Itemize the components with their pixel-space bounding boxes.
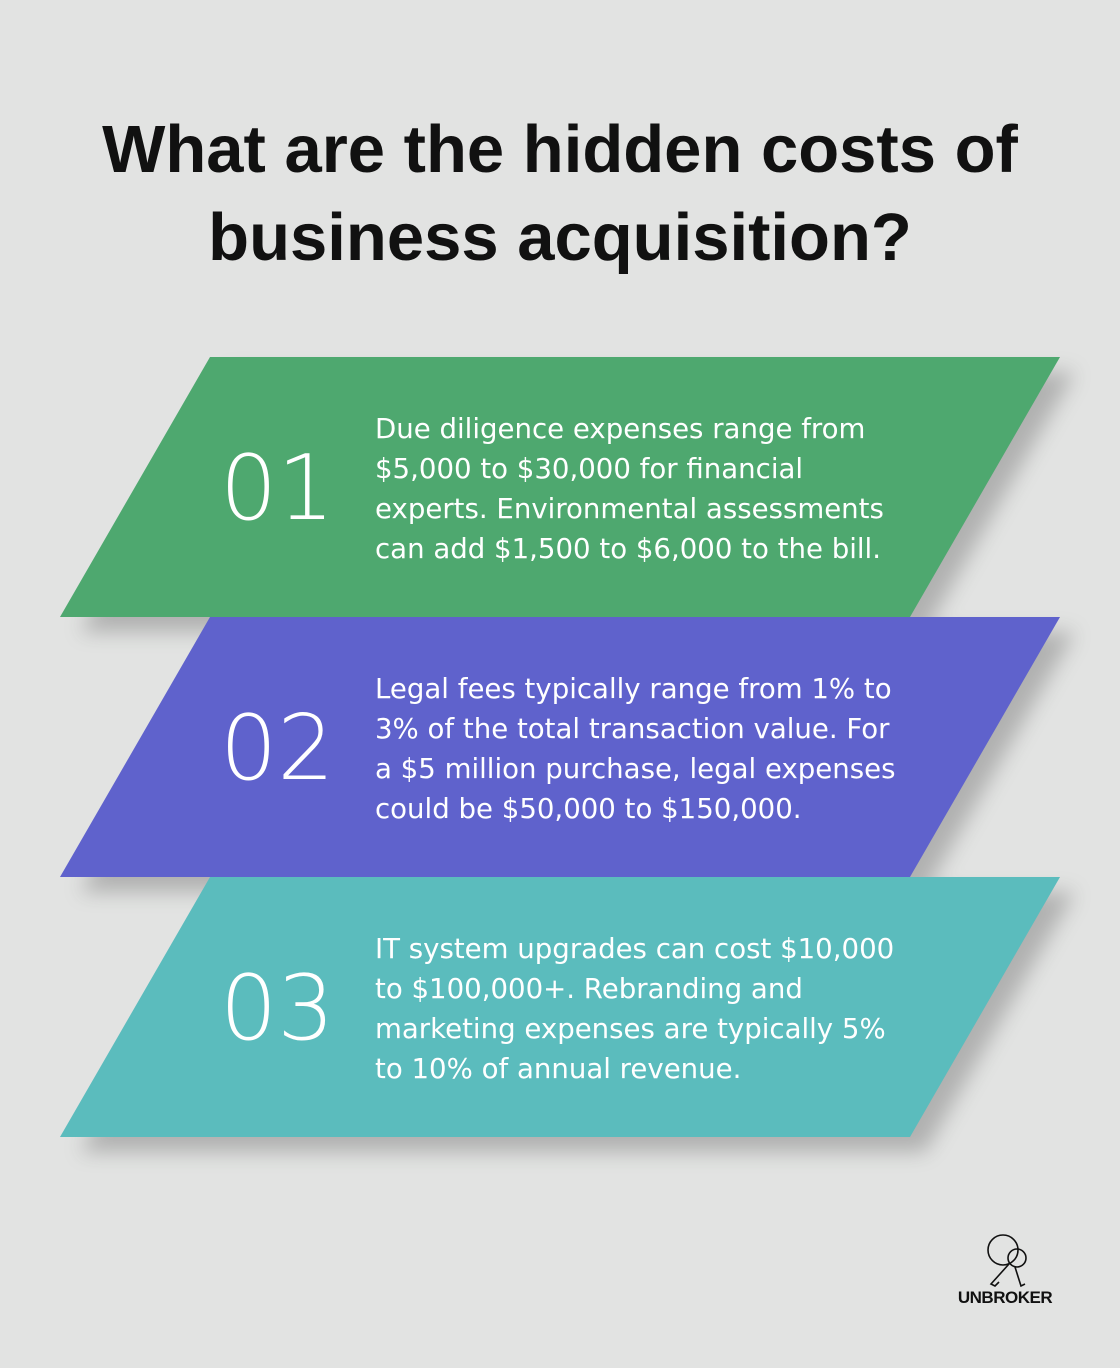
logo xyxy=(958,1234,1052,1307)
number 01: 01 xyxy=(220,436,335,541)
text 01: Due diligence expenses range from $5,000 to $30,000 for financial experts. Environmental assessments can add $1,500 to $6,000 to the bill. xyxy=(375,412,884,565)
number 02: 02 xyxy=(220,696,335,801)
text 02: Legal fees typically range from 1% to 3% of the total transaction value. For a $5 million purchase, legal expenses could be $50,000 to $150,000. xyxy=(375,672,896,825)
text 03: IT system upgrades can cost $10,000 to $100,000+. Rebranding and marketing expenses are typically 5% to 10% of annual revenue. xyxy=(375,932,894,1085)
icon: keys xyxy=(987,1234,1027,1288)
title xyxy=(102,112,1018,275)
title: What are the hidden costs of xyxy=(102,112,1018,187)
title: business acquisition? xyxy=(208,200,912,275)
panel 2 shape xyxy=(60,617,1060,877)
number 03: 03 xyxy=(220,956,335,1061)
panel 3 shape xyxy=(60,877,1060,1137)
panel 1 shape xyxy=(60,357,1060,617)
logo text: UNBROKER xyxy=(958,1288,1052,1307)
